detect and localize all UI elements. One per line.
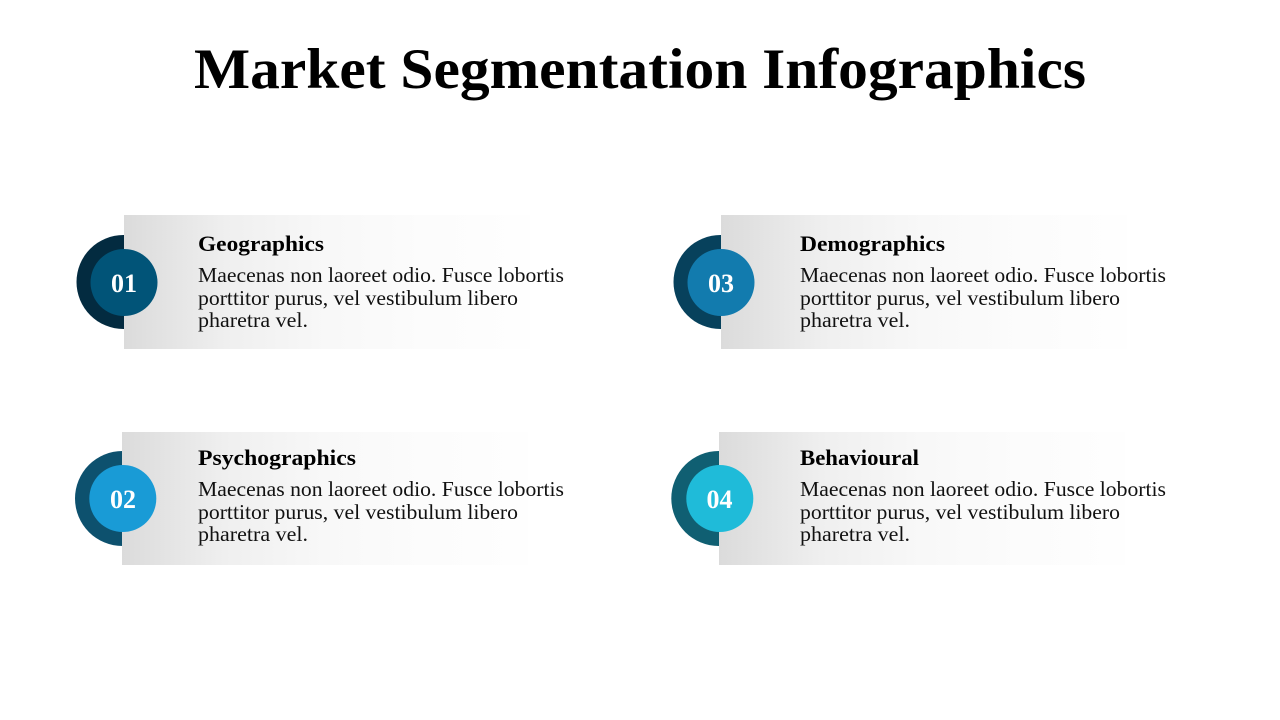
text block 04: porttitor purus, vel vestibulum libero [800,500,1120,524]
icon: outer ring 01 [76,235,170,329]
icon: number badge 03: 03 [708,269,734,298]
icon: number badge 03 [688,249,754,316]
text block 02: Maecenas non laoreet odio. Fusce lobortis [198,477,564,501]
text block 04: pharetra vel. [800,522,910,546]
text block 03: Maecenas non laoreet odio. Fusce lobortis [800,263,1166,287]
heading: Behavioural: Behavioural [800,445,919,470]
text block 01 [198,263,564,332]
icon: number badge 02: 02 [110,485,136,514]
panel: 04 Behavioural [671,432,1166,565]
icon: number badge 04 [686,465,753,532]
icon: outer ring 02 [75,451,170,546]
heading: Geographics: Geographics [198,231,324,256]
text block 04: Maecenas non laoreet odio. Fusce lobortis [800,477,1166,501]
icon: number badge 01: 01 [111,269,137,298]
icon: number badge 04: 04 [706,485,732,514]
text block 02: porttitor purus, vel vestibulum libero [198,500,518,524]
heading: Demographics: Demographics [800,231,945,256]
title: Market Segmentation Infographics [194,38,1086,101]
text block 01: pharetra vel. [198,308,308,332]
card background 03 [721,215,1127,349]
text block 03: pharetra vel. [800,308,910,332]
icon: number badge 02 [89,465,156,532]
card background 01 [124,215,530,349]
text block 04 [800,477,1166,546]
text block 01: porttitor purus, vel vestibulum libero [198,286,518,310]
card background 02 [122,432,528,565]
panel: 02 Psychographics [75,432,564,565]
icon: outer ring 04 [671,451,766,546]
card background 04 [719,432,1125,565]
heading: Psychographics: Psychographics [198,445,356,470]
panel: 03 Demographics [674,215,1166,349]
text block 03: porttitor purus, vel vestibulum libero [800,286,1120,310]
text block 02 [198,477,564,546]
panel: 01 Geographics [76,215,564,349]
icon: outer ring 03 [674,235,768,329]
text block 01: Maecenas non laoreet odio. Fusce lobortis [198,263,564,287]
text block 02: pharetra vel. [198,522,308,546]
text block 03 [800,263,1166,332]
icon: number badge 01 [90,249,158,316]
